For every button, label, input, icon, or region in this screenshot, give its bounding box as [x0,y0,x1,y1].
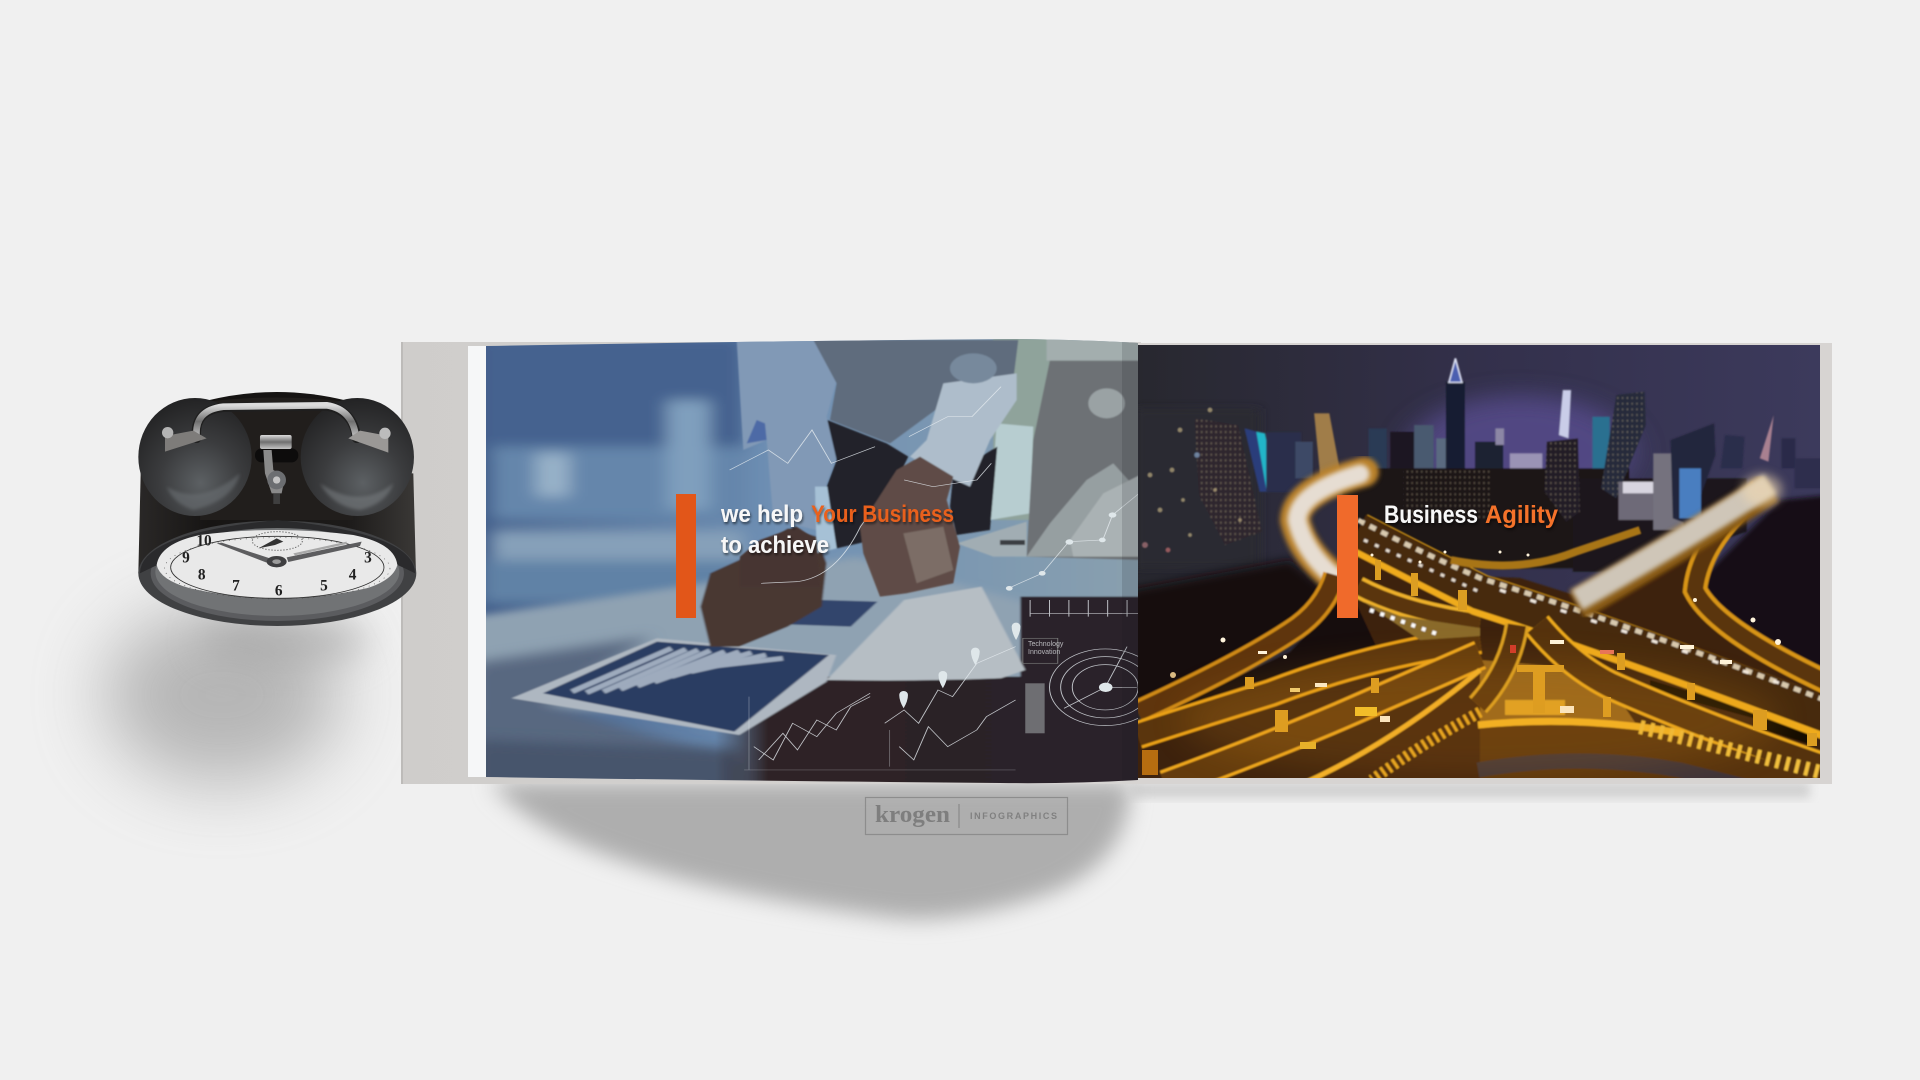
data overlay lines and pins [730,387,1161,770]
bottom arc road [1480,721,1830,790]
clock numerals [182,532,372,599]
clock numerals: 6 [275,582,283,599]
second subdial [252,532,302,550]
clock body [138,473,416,573]
clock cast shadow [104,607,370,783]
warm glow over lower roads [1180,660,1780,780]
thin ramp [1451,530,1640,565]
road R5 [1695,490,1830,684]
road L2 [1138,640,1480,735]
navy report panel [543,642,829,732]
warm glow top right [1742,474,1782,506]
road A to main crossing [1358,533,1830,720]
heading: business agility: Agility [1485,501,1558,529]
clock top rim [207,392,347,423]
black vest [827,420,908,548]
paper sheet left [511,638,836,735]
heading: we help your business to achieve: Your Business [811,501,954,528]
heading: we help your business to achieve: to achieve [721,532,829,559]
heading: we help your business to achieve [720,501,954,559]
orange accent bar right [1337,495,1358,618]
right sleeve [910,373,1017,487]
torso [813,340,1018,443]
dark ground left and right [1138,556,1319,716]
mockup scene [74,339,1832,931]
clock face bezel [138,521,416,626]
right hand [860,457,960,597]
clock numerals: 3 [364,550,372,567]
orange accent bar left [676,494,696,618]
lit road upper left [1295,472,1364,578]
logo: krogen infographics: krogen [875,802,950,828]
overlay label: technology innovation: Innovation [1028,649,1060,656]
paper mid chart panel [791,599,878,628]
clock hands [217,538,362,567]
book cast shadow [474,782,1810,919]
interchange road network [1130,472,1830,790]
left page white edge [468,346,486,777]
paper sheet right [827,587,1025,681]
clock dial [157,530,397,598]
blurred office background [482,337,744,603]
road L1 [1138,575,1335,712]
heading: we help your business to achieve: we help [720,501,803,528]
road ground base [1138,553,1820,778]
clock numerals: 10 [196,532,212,549]
logo: krogen infographics [866,798,1068,834]
skyline [1134,358,1825,572]
clock numerals: 8 [198,566,206,583]
left hand upper [739,526,818,561]
cars and street lamps [1170,550,1781,749]
spine shading [1122,340,1139,785]
laptop chart triangles [1027,463,1129,558]
clock numerals: 4 [349,566,357,583]
clock numerals: 9 [182,550,190,567]
heading: business agility: Business [1384,501,1478,529]
table surface [473,557,1030,713]
white traffic band [1577,488,1770,605]
overlay label: technology innovation: Technology [1028,641,1064,648]
right bell [301,398,414,516]
report bars [572,648,783,693]
road L3 [1165,655,1480,785]
upper figure and laptop [737,333,1143,597]
left sleeve [737,340,837,530]
dark desk overlay bottom right [718,676,1022,784]
laptop screen [1027,360,1143,560]
left page photo: business desk with data overlay [473,330,1161,797]
right page photo: city interchange at night [1130,345,1830,790]
road supports [1142,560,1817,775]
central golden underpass [1480,660,1640,730]
bokeh lights left [1142,408,1242,552]
brochure cover [401,342,1832,784]
window and foliage [993,333,1050,520]
overlay label: technology innovation [1028,641,1064,656]
traffic on lit roads [1364,540,1480,592]
clock numerals: 7 [232,578,240,595]
heading: business agility [1384,501,1558,529]
left hand lower [701,528,827,647]
handle brackets [162,427,391,453]
road L4 wide lane [1380,775,1381,776]
road R3 [1478,625,1517,705]
laptop base [957,522,1027,557]
road R2 [1537,625,1830,770]
center striker [255,435,298,504]
upper ramp [1358,587,1480,622]
left bell [138,398,252,516]
clock numerals: 5 [320,578,328,595]
logo: krogen infographics: INFOGRAPHICS [970,811,1057,821]
handle [196,405,357,438]
alarm clock [138,392,416,626]
light shirt gap [815,487,837,553]
